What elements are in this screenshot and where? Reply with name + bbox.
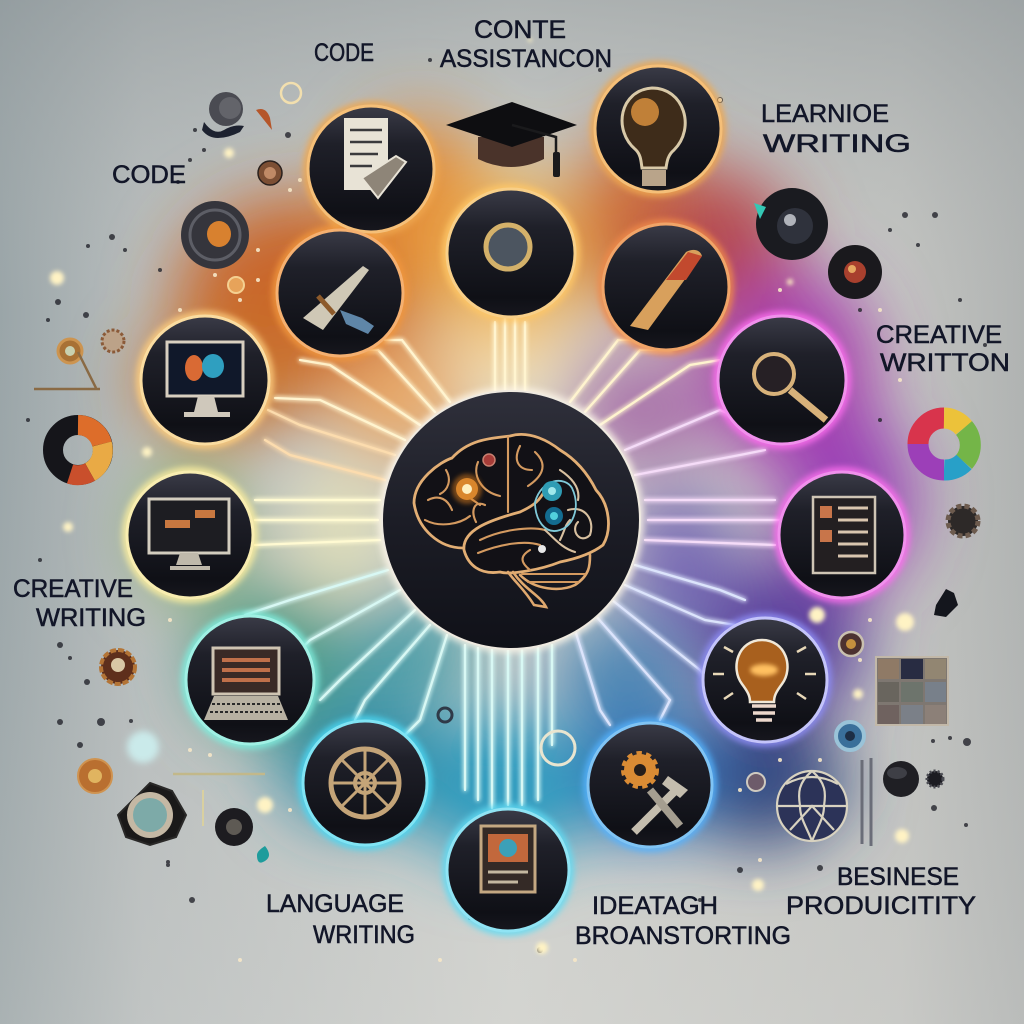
connector lines [245, 318, 780, 808]
side icon: globe [777, 771, 847, 841]
side icon: colour ring right [918, 418, 970, 470]
label: produicitity: PRODUICITITY [786, 892, 976, 920]
label: learnioe: LEARNIOE [761, 100, 889, 128]
side icon: lens right [828, 245, 882, 299]
side icon: star lens bottom left [118, 783, 186, 845]
side icon: glowing orb left [127, 731, 159, 763]
side icon: small gold ring [78, 759, 112, 793]
label: code left: CODE [112, 161, 186, 189]
side icon: small ring bottom left [438, 708, 452, 722]
node: wheel [303, 721, 427, 845]
label: besinese: BESINESE [837, 863, 959, 891]
side icon: small gear top left [258, 161, 282, 185]
side icon: small gem right [934, 589, 958, 617]
node: pen right [603, 224, 729, 350]
label: writton: WRITTON [880, 349, 1010, 377]
label: writing left: WRITING [36, 604, 146, 632]
side icon: small amber ring [228, 277, 244, 293]
side icon: donut chart left [53, 425, 103, 475]
brain lobes fill [414, 434, 608, 573]
side icon: bronze rings left [34, 330, 124, 389]
node: bulb right [703, 618, 827, 742]
label: code top: CODE [314, 39, 374, 67]
node ring glows [126, 65, 906, 932]
side icon: tile grid [876, 657, 948, 725]
side icon: ring bottom right [836, 632, 864, 750]
node: list right [779, 472, 905, 598]
label: writing bottom: WRITING [313, 921, 415, 949]
node: monitor upper left [141, 316, 269, 444]
side icon: dark disc bottom left [215, 808, 253, 846]
side icon: gear right [948, 506, 978, 536]
node: light bulb top right [595, 66, 721, 192]
coloured glow wash [140, 115, 915, 865]
side icon: vertical bars [862, 758, 871, 846]
node: rocket left [277, 230, 403, 356]
side icon: copper stain [256, 109, 272, 130]
brain nodes [452, 454, 563, 553]
node: magnifier [718, 316, 846, 444]
glow around central hub [378, 387, 644, 653]
side icon: gem left [101, 650, 135, 684]
side icon: teal drop [257, 846, 269, 863]
side icon: orb top left [202, 92, 244, 138]
node: document top left [308, 106, 434, 232]
brain outline [414, 434, 608, 607]
node: monitor left [127, 472, 253, 598]
side icon: gold bar and dot [173, 774, 265, 826]
label: ideatagh: IDEATAGH [592, 892, 718, 920]
title line: assistancon: ASSISTANCON [440, 45, 612, 73]
side icon: knob and gear [883, 761, 943, 797]
node: picture card bottom [447, 809, 569, 931]
side icon: small gold ring top [281, 83, 301, 103]
label: writing top right: WRITING [763, 130, 911, 158]
side icon: dark lens left [181, 201, 249, 269]
label: creative left: CREATIVE [13, 575, 133, 603]
side icon: lens top right [754, 188, 828, 260]
node: tools [588, 723, 712, 847]
graduation cap [446, 102, 577, 177]
side icon: ring near bottom [541, 731, 575, 765]
node: laptop [186, 616, 314, 744]
title: conte: CONTE [474, 16, 566, 44]
label: broanstorting: BROANSTORTING [575, 922, 791, 950]
node: ring top centre [447, 189, 575, 317]
side icon: small ring near globe [747, 773, 765, 791]
central hub with brain [382, 391, 640, 649]
label: language: LANGUAGE [266, 890, 404, 918]
label: creative right: CREATIVE [876, 321, 1002, 349]
